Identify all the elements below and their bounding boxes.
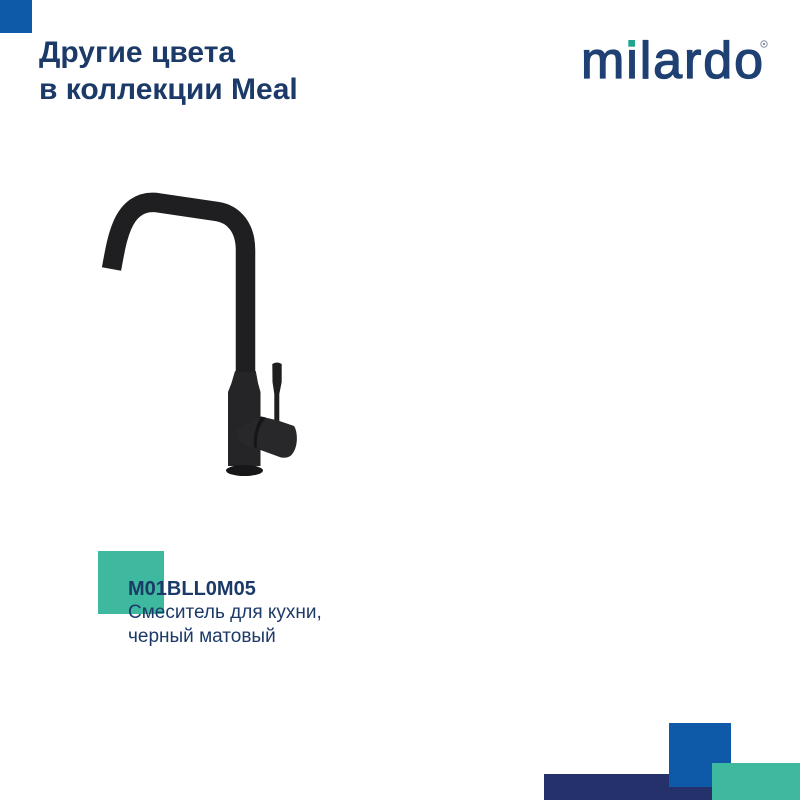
product description [128, 602, 322, 647]
title [39, 36, 298, 106]
teal block [712, 763, 800, 800]
spout [112, 202, 246, 376]
decorative corner square: top left [0, 0, 32, 33]
title: в коллекции Meal [39, 73, 298, 106]
product description: Смеситель для кухни, [128, 602, 322, 623]
blue square [669, 723, 731, 787]
handle [237, 416, 297, 458]
decorative blocks: bottom right [544, 723, 800, 800]
lever [272, 362, 282, 422]
product code: M01BLL0M05 [128, 578, 256, 600]
product description: черный матовый [128, 626, 276, 647]
faucet body [228, 371, 260, 466]
handle seam [254, 416, 266, 448]
product text block [128, 578, 322, 647]
title: Другие цвета [39, 36, 235, 69]
navy bar [544, 774, 714, 800]
teal square behind the product text [98, 551, 164, 614]
base ring [226, 465, 263, 476]
